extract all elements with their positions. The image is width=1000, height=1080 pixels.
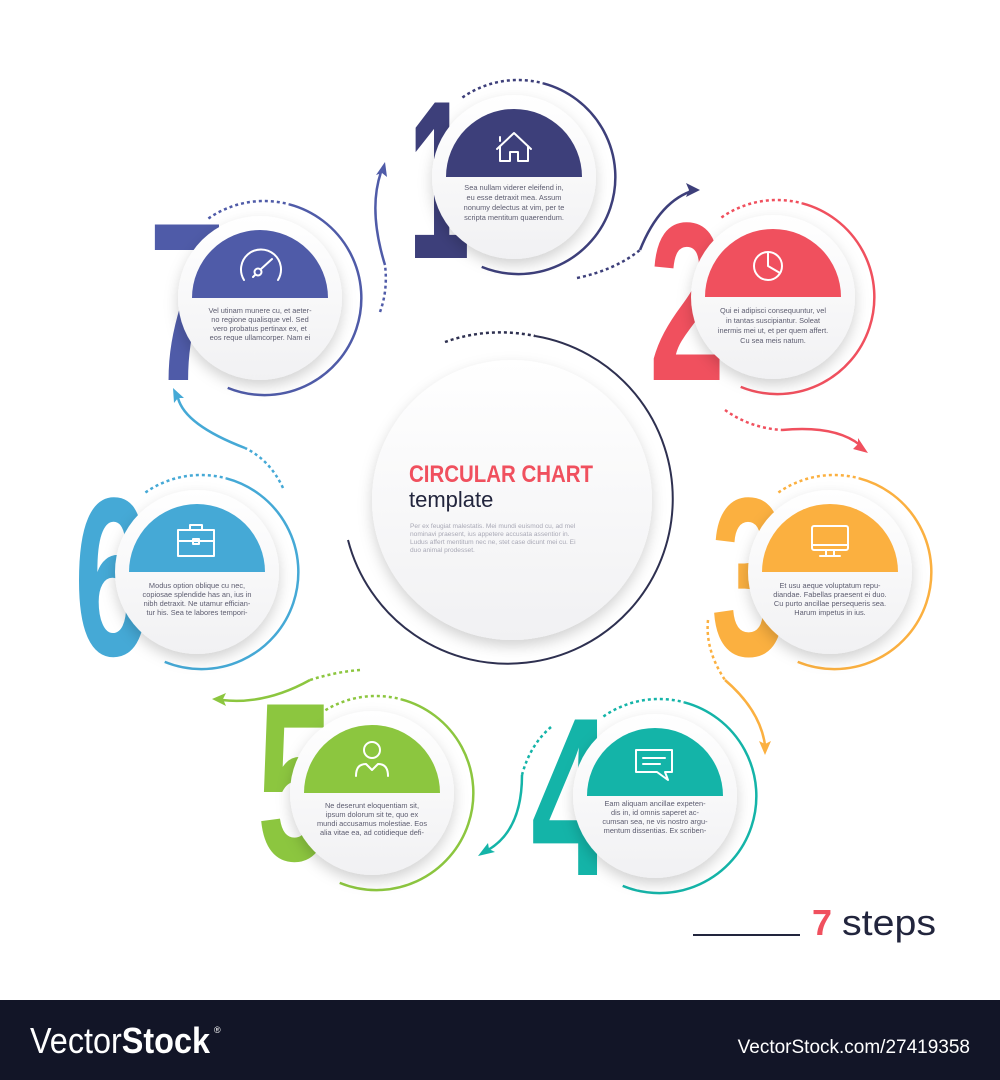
arrow: 5 to 6: [212, 670, 360, 706]
center paragraph: duo animal prodesset.: [410, 547, 475, 554]
step 3: [711, 450, 931, 703]
step 1: [408, 53, 615, 306]
arrow: 6 to 7: [173, 388, 283, 488]
step 4: [531, 670, 756, 923]
center subtitle: template: [409, 487, 493, 512]
step 7: Vel utinam munere cu, et aeter-: [208, 306, 312, 315]
step 1: eu esse detraxit mea. Assum: [467, 193, 561, 202]
step 7: [149, 175, 361, 428]
step 2: inermis mei ut, et per quem affert.: [718, 326, 828, 335]
7 steps label: steps: [842, 902, 936, 943]
footer: VectorStock.com/27419358: [738, 1037, 970, 1058]
icon: person: [356, 742, 388, 776]
step 3: diandae. Fabellas praesent ei duo.: [773, 590, 887, 599]
step 4: mentum dissentias. Ex scriben-: [604, 826, 707, 835]
step 4: Eam aliquam ancillae expeten-: [604, 799, 706, 808]
step 7: vero probatus pertinax ex, et: [213, 324, 307, 333]
step 5: [257, 655, 473, 908]
arrow: 4 to 5: [478, 727, 551, 856]
footer: VectorStock: [30, 1020, 211, 1061]
step 4: cumsan sea, ne vis nostro argu-: [602, 817, 708, 826]
step 5: 5: [257, 655, 333, 908]
center paragraph: Ludus affert mentitum nec ne, stet case dicunt mei cu. Ei: [410, 539, 576, 546]
step 7: 7: [149, 175, 225, 428]
step 6: nibh detraxit. Ne utamur effician-: [144, 599, 251, 608]
center ring: [348, 332, 673, 664]
step 4: dis in, id omnis saperet ac-: [611, 808, 699, 817]
icon: monitor: [812, 526, 848, 556]
step 2: [649, 175, 874, 428]
step 6: [74, 450, 298, 703]
arrow: 1 to 2: [577, 183, 700, 278]
step 2: 2: [649, 175, 725, 428]
step 4: 4: [531, 670, 611, 923]
center circle: [372, 360, 652, 640]
step 2: in tantas suscipiantur. Soleat: [726, 316, 820, 325]
step 3: Cu purto ancillae persequeris sea.: [774, 599, 886, 608]
step 1: 1: [408, 53, 470, 306]
center paragraph: [410, 523, 576, 554]
center title: CIRCULAR CHART: [409, 461, 593, 488]
footer: [0, 1000, 1000, 1080]
step 6: 6: [74, 450, 150, 703]
icon: gauge: [241, 249, 281, 280]
step 5: ipsum dolorum sit te, quo ex: [326, 810, 419, 819]
step 3: 3: [711, 450, 787, 703]
step 6: tur his. Sea te labores tempori-: [146, 608, 248, 617]
icon: chat bubble: [636, 750, 672, 780]
icon: house: [497, 133, 531, 161]
step 2: Qui ei adipisci consequuntur, vel: [720, 306, 826, 315]
icon: briefcase: [178, 525, 214, 556]
step 6: copiosae splendide has an, ius in: [143, 590, 251, 599]
7 steps label: 7: [812, 902, 832, 943]
arrow: 3 to 4: [708, 620, 771, 755]
step 3: Harum impetus in ius.: [794, 608, 866, 617]
step 7: eos reque ullamcorper. Nam ei: [210, 333, 311, 342]
center panel: [348, 332, 673, 664]
step 1: nonumy delectus at vim, per te: [464, 203, 564, 212]
arrow: 2 to 3: [725, 410, 868, 453]
step 5: Ne deserunt eloquentiam sit,: [325, 801, 419, 810]
step 7: no regione qualisque vel. Sed: [211, 315, 309, 324]
7 steps label: [693, 902, 936, 943]
arrow: 7 to 1: [375, 162, 387, 312]
step 1: scripta mentitum quaerendum.: [464, 213, 564, 222]
connecting arrows: [173, 162, 868, 856]
center paragraph: Per ex feugiat malestatis. Mei mundi euismod cu, ad mel: [410, 523, 576, 530]
step 5: alia vitae ea, ad cotidieque defi-: [320, 828, 425, 837]
step 6: Modus option oblique cu nec,: [149, 581, 245, 590]
step 5: mundi accusamus molestiae. Eos: [317, 819, 427, 828]
center paragraph: nominavi praesent, ius appetere accusata assentior in.: [410, 531, 570, 538]
step 2: Cu sea meis natum.: [740, 336, 806, 345]
footer: ®: [214, 1025, 221, 1035]
icon: pie chart: [754, 252, 782, 280]
step 3: Et usu aeque voluptatum repu-: [779, 581, 881, 590]
step 1: Sea nullam viderer eleifend in,: [464, 183, 564, 192]
